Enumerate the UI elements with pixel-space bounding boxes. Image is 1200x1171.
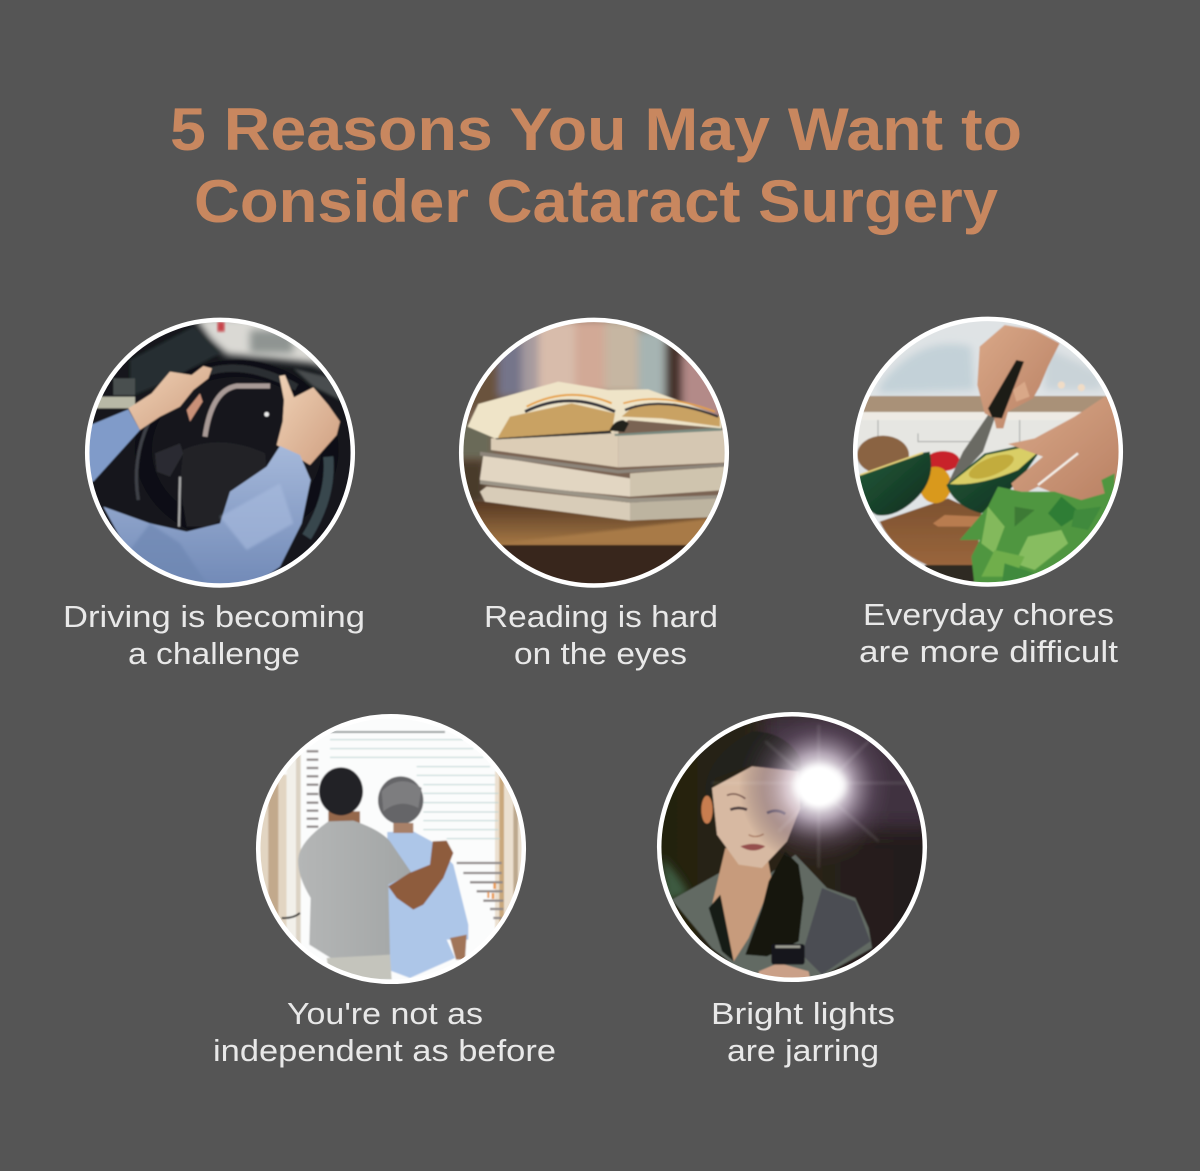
knife [948, 415, 995, 483]
photo: stack of books [464, 322, 725, 584]
lemon [919, 467, 951, 503]
curtains [260, 774, 288, 928]
left sleeve [87, 409, 140, 482]
photo: woman with glare [662, 716, 922, 978]
white ring [855, 319, 1121, 584]
white ring [461, 320, 727, 586]
man shirt [298, 821, 412, 960]
panel: independence [213, 708, 556, 1068]
open book [468, 382, 722, 438]
photo: couple at window [260, 718, 522, 980]
panel: reading [455, 310, 736, 671]
caption: are jarring [727, 1033, 879, 1068]
blinds [330, 740, 500, 839]
caption: are more difficult [859, 634, 1118, 669]
table [473, 501, 707, 546]
coat [672, 855, 872, 978]
ponytail [745, 851, 804, 956]
white ring [87, 320, 353, 586]
left hand [128, 366, 212, 430]
man head [328, 811, 360, 826]
right sleeve and torso [103, 446, 311, 597]
avocado half left [858, 452, 931, 516]
upper hand [977, 325, 1060, 428]
caption: a challenge [128, 636, 300, 671]
caption: You're not as [287, 996, 483, 1031]
avocado right [946, 442, 1042, 513]
caption: Everyday chores [863, 597, 1114, 632]
photo: cutting avocado [857, 321, 1119, 582]
white ring [258, 716, 524, 982]
man arm [388, 841, 453, 910]
caption [711, 996, 895, 1068]
caption: Reading is hard [484, 599, 718, 634]
title: Consider Cataract Surgery [194, 168, 999, 235]
caption [213, 996, 556, 1068]
potato [857, 436, 909, 474]
flare [742, 722, 884, 861]
title: 5 Reasons You May Want to [170, 96, 1022, 163]
white ring [659, 714, 925, 980]
panel: driving [63, 310, 365, 671]
books stack [480, 487, 630, 521]
title [170, 96, 1022, 235]
caption: on the eyes [514, 636, 687, 671]
right hand [1008, 397, 1128, 500]
right hand [277, 375, 340, 465]
caption [63, 599, 365, 671]
head [710, 732, 799, 786]
board [880, 498, 981, 567]
panel: bright lights [652, 706, 935, 1068]
phone and hand [758, 963, 810, 978]
panel: chores [848, 310, 1128, 669]
woman [383, 831, 468, 978]
neck and chest [712, 848, 772, 961]
photo: hands on steering wheel [89, 322, 350, 584]
caption [484, 599, 718, 671]
caption: Bright lights [711, 996, 895, 1031]
caption: Driving is becoming [63, 599, 365, 634]
caption: independent as before [213, 1033, 556, 1068]
tomato [926, 451, 960, 471]
greens [960, 473, 1115, 590]
caption [859, 597, 1118, 669]
